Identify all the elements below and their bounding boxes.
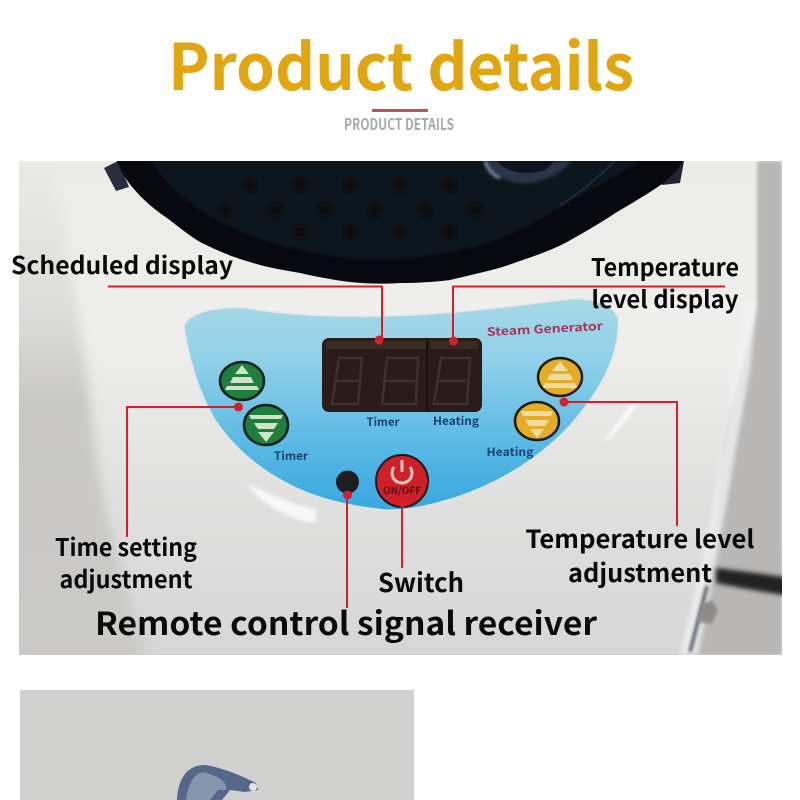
icon: power button: ON/OFF <box>383 482 421 497</box>
label: Temperature level adjustment: adjustment <box>568 554 712 590</box>
callout lines and dots <box>108 286 725 608</box>
photo background: steamer body <box>0 161 790 670</box>
icon: steam nozzle <box>177 765 258 800</box>
subtitle with accent rule: PRODUCT DETAILS <box>344 111 454 135</box>
icon: heating down button <box>515 402 559 440</box>
label: Temperature level display: level display <box>592 280 739 315</box>
label: Remote control signal receiver: Remote control signal receiver <box>95 599 597 645</box>
LED display <box>322 338 482 412</box>
blue control panel <box>184 299 618 510</box>
label: Temperature level display: Temperature <box>591 248 739 283</box>
brand label: Steam Generator: Steam Generator <box>486 318 604 340</box>
label: Timer: Timer <box>274 448 309 464</box>
label: Heating on display: Heating <box>433 413 479 429</box>
icon: heating up button <box>538 358 582 396</box>
icon: remote receiver <box>336 470 359 494</box>
label: Scheduled display: Scheduled display <box>11 246 233 281</box>
label: Time setting adjustment: adjustment <box>60 560 192 595</box>
steamer bowl: dark lid <box>104 161 684 284</box>
title: Product details <box>168 17 634 109</box>
icon: power button <box>376 455 428 507</box>
label: Heating: Heating <box>486 444 534 460</box>
panel: second product photo <box>20 690 414 800</box>
label: Temperature level display <box>591 248 739 315</box>
panel: control panel product photo <box>0 161 790 670</box>
label: Temperature level adjustment: Temperature level <box>526 520 755 556</box>
label: Switch: Switch <box>378 563 464 600</box>
label: Time setting adjustment <box>55 528 197 595</box>
icon: timer down button <box>244 405 288 445</box>
label: Temperature level adjustment <box>526 520 755 590</box>
icon: timer up button <box>220 362 264 400</box>
label: Time setting adjustment: Time setting <box>55 528 197 563</box>
label: Timer on display: Timer <box>366 414 400 430</box>
